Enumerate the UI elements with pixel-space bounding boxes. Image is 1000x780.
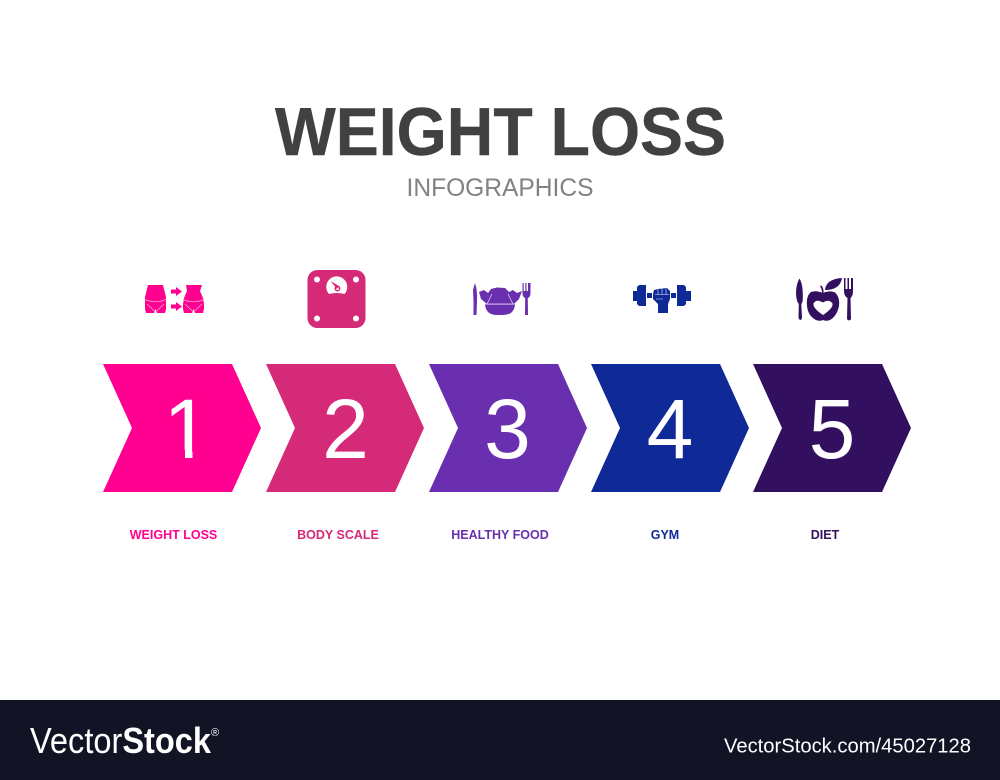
step 3 arrow: 3 <box>484 382 531 476</box>
label: body scale: BODY SCALE <box>297 528 379 542</box>
step 5 arrow: 5 <box>809 382 855 476</box>
step 5 arrow <box>753 364 911 492</box>
label: weight loss: WEIGHT LOSS <box>130 528 217 542</box>
icon: gym dumbbell fist <box>633 285 691 313</box>
step 2 arrow <box>266 364 424 492</box>
step 1 arrow: 1 <box>164 382 210 476</box>
footer logo: VectorStock <box>30 720 212 761</box>
title: WEIGHT LOSS <box>275 94 726 170</box>
step 4 arrow <box>591 364 749 492</box>
label: healthy food: HEALTHY FOOD <box>451 528 549 542</box>
step 4 arrow: 4 <box>647 382 693 476</box>
step 3 arrow <box>429 364 587 492</box>
icon: weight loss waists <box>145 285 204 313</box>
label: gym: GYM <box>651 528 679 542</box>
subtitle: INFOGRAPHICS <box>406 174 594 202</box>
icon: body scale <box>308 270 366 328</box>
label: diet: DIET <box>811 528 840 542</box>
icon: diet apple <box>796 278 853 321</box>
icon: healthy food <box>473 283 530 315</box>
registered mark: ® <box>211 727 219 739</box>
footer bar <box>0 700 1000 780</box>
step 1 arrow <box>103 364 261 492</box>
step 2 arrow: 2 <box>322 382 369 476</box>
footer url: VectorStock.com/45027128 <box>724 736 971 758</box>
